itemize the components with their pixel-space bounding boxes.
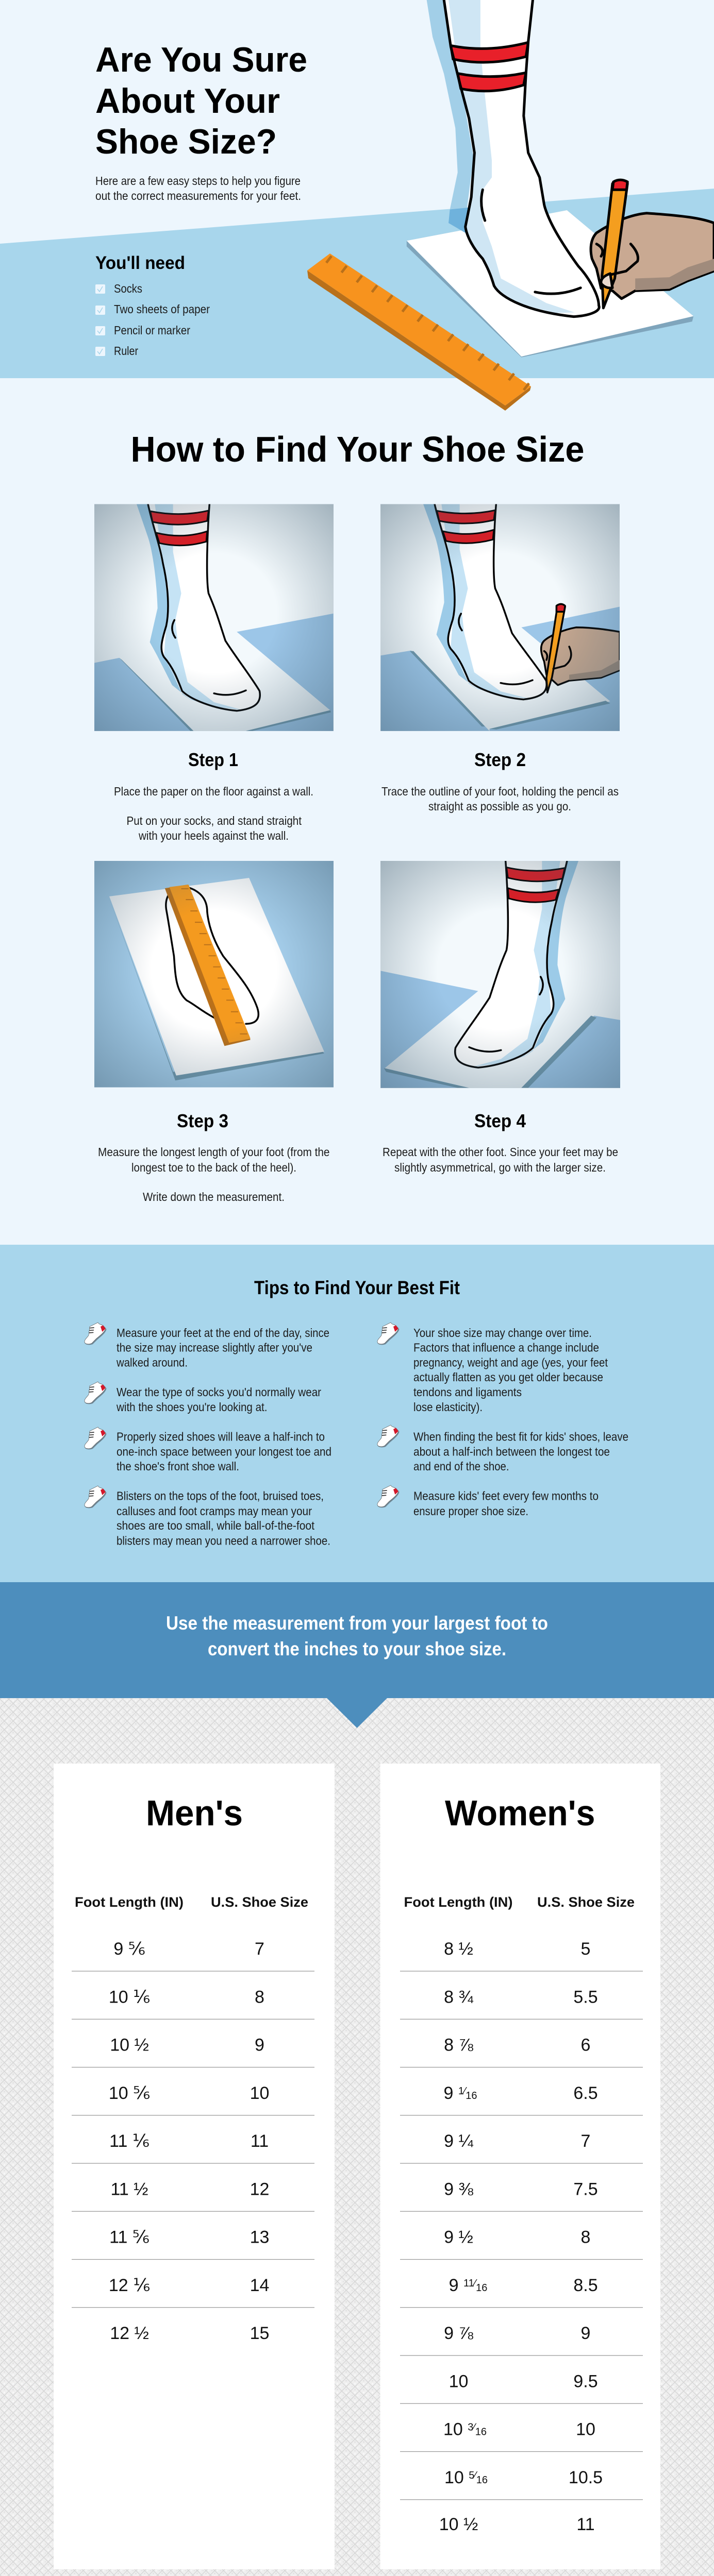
women's rows: 10 [444,2468,464,2487]
women's rows: 8 ¾ [444,1987,473,2007]
tips right column: Measure kids' feet every few months to [413,1489,599,1503]
men's rows: 11 [251,2131,269,2151]
women's rows: 9 ¼ [444,2131,473,2151]
women's rows: 9 ⅜ [444,2179,473,2199]
tips left column: blisters may mean you need a narrower shoe. [117,1534,330,1548]
caption: step 2: Step 2 [474,749,526,770]
women's rows: 8 ⅞ [444,2035,473,2055]
caption: step 2 [381,749,619,813]
tips right column: about a half-inch between the longest toe [413,1445,610,1458]
icon: ruler [307,253,531,411]
subtitle: out the correct measurements for your feet. [95,189,301,202]
women's rows: 10.5 [569,2468,603,2487]
women's rows: 9 [581,2324,590,2343]
tips left column: shoes are too small, while ball-of-the-foot [117,1519,315,1532]
tips right column: Factors that influence a change include [413,1341,599,1354]
tips left column: with the shoes you're looking at. [116,1400,268,1414]
checklist: you'll need: Ruler [114,344,138,358]
men's rows: 10 ⅙ [109,1987,150,2007]
table headers: U.S. Shoe Size [537,1894,635,1910]
tips right column: lose elasticity). [413,1400,483,1414]
men's rows [109,1939,269,2343]
tips right column: and end of the shoe. [413,1460,509,1473]
floor [0,189,714,378]
women's rows: ⁄ [472,2278,477,2289]
heading: women's: Women's [445,1793,595,1833]
caption: step 4: Step 4 [474,1110,526,1131]
men's rows: 11 ½ [110,2179,148,2199]
checklist: you'll need: You'll need [95,253,185,273]
men's rows: 12 ⅙ [109,2276,150,2295]
image: step 1 [94,504,334,732]
women's rows: 5 [469,2470,474,2481]
women's rows: 7 [581,2131,590,2151]
tips right column: ensure proper shoe size. [413,1504,528,1518]
women's rows: 10 [443,2419,463,2439]
table headers: U.S. Shoe Size [211,1894,308,1910]
women's rows: 9.5 [573,2371,598,2391]
men's rows: 11 ⅙ [109,2131,150,2151]
women's rows: 3 [468,2421,473,2433]
banner: convert the inches to your shoe size. [208,1638,506,1659]
checklist: you'll need: Socks [114,282,142,295]
caption: step 1: with your heels against the wall. [138,829,289,842]
subtitle [95,174,301,202]
caption: step 4: Repeat with the other foot. Since your feet may be [383,1145,618,1159]
women's rows: ⁄ [472,2470,477,2481]
image: step 4 [380,861,621,1088]
caption: step 1: Put on your socks, and stand straight [127,814,302,827]
women's rows: 8.5 [573,2276,598,2295]
women's rows: 16 [466,2090,477,2102]
caption: step 4 [383,1110,618,1174]
women's rows: 6 [581,2035,590,2055]
title: About Your [95,81,280,121]
women's rows: 16 [476,2475,488,2486]
tips left column: Wear the type of socks you'd normally wear [117,1385,321,1399]
caption: step 3: Measure the longest length of your foot (from the [98,1145,330,1159]
men's rows: 10 [250,2083,269,2103]
tips left column: calluses and foot cramps may mean your [117,1504,312,1518]
title: Shoe Size? [95,122,277,161]
heading: men's: Men's [146,1793,243,1833]
heading: how to find your shoe size: How to Find Your Shoe Size [131,429,585,469]
checklist: you'll need [95,253,210,358]
women's rows: 16 [475,2427,487,2438]
illustration: foot being traced on paper [407,0,714,358]
men's rows: 9 ⅚ [113,1939,145,1959]
panel: tips [0,1245,714,1582]
table headers: Foot Length (IN) [404,1894,512,1910]
caption: step 1: Step 1 [188,749,238,770]
women's rows: 11 [576,2515,595,2534]
subtitle: Here are a few easy steps to help you figure [95,174,301,188]
image: step 3 [94,861,334,1088]
banner: Use the measurement from your largest foot to [166,1613,548,1634]
banner [0,1582,714,1728]
men's rows: 10 ⅚ [109,2083,150,2103]
caption: step 1 [114,749,313,842]
caption: step 1: Place the paper on the floor against a wall. [114,785,313,798]
men's rows: 11 ⅚ [109,2228,150,2247]
women's rows: 9 [443,2083,453,2103]
image: step 2 [380,504,620,732]
caption: step 3 [98,1110,330,1204]
tips right column: actually flatten as you get older because [413,1370,603,1384]
tips left column: one-inch space between your longest toe and [117,1445,331,1458]
tips right column: tendons and ligaments [413,1385,522,1399]
women's rows: 6.5 [573,2083,598,2103]
tip icons [85,1323,400,1508]
men's rows: 7 [255,1939,264,1959]
women's rows: 11 [463,2278,474,2289]
panel: hero [0,0,714,1245]
checklist: you'll need: Two sheets of paper [114,302,210,316]
table headers: Foot Length (IN) [75,1894,184,1910]
tips left column: Properly sized shoes will leave a half-inch to [117,1430,325,1444]
tips right column: When finding the best fit for kids' shoes, leave [413,1430,628,1444]
title: Are You Sure [95,40,307,79]
tips right column: Your shoe size may change over time. [413,1326,592,1340]
women's rows: 8 [581,2228,590,2247]
men's rows: 15 [250,2324,269,2343]
women's rows: 9 ⅞ [444,2324,473,2343]
tips right column [413,1326,628,1518]
caption: step 4: slightly asymmetrical, go with the larger size. [394,1161,606,1174]
women's rows: 5.5 [573,1987,598,2007]
women's rows: 9 ½ [444,2228,473,2247]
men's rows: 9 [255,2035,264,2055]
panel: men's chart [54,1764,335,2569]
heading: tips: Tips to Find Your Best Fit [254,1277,460,1298]
women's rows [439,1939,603,2534]
men's rows: 12 [250,2179,269,2199]
men's rows: 13 [250,2228,269,2247]
women's rows: 16 [476,2282,487,2294]
tips left column: walked around. [116,1356,188,1369]
title [95,40,307,161]
tips right column: pregnancy, weight and age (yes, your feet [413,1356,608,1369]
caption: step 3: longest toe to the back of the heel). [131,1161,296,1174]
tips left column: the size may increase slightly after you've [117,1341,312,1354]
women's rows: 9 [449,2276,459,2295]
women's rows: 10 ½ [439,2515,478,2534]
table headers [404,1894,635,1910]
caption: step 3: Write down the measurement. [143,1190,285,1204]
women's rows: 5 [581,1939,590,1959]
tips left column [116,1326,331,1548]
women's rows: ⁄ [471,2421,476,2433]
women's rows: ⁄ [461,2086,467,2097]
women's rows: 7.5 [573,2179,598,2199]
men's rows: 10 ½ [110,2035,149,2055]
women's rows: 8 ½ [444,1939,473,1959]
tips left column: Blisters on the tops of the foot, bruised toes, [117,1489,324,1503]
pattern background [0,1698,714,2576]
tips left column: the shoe's front shoe wall. [117,1460,239,1473]
men's rows: 8 [255,1987,264,2007]
men's rows: 14 [250,2276,269,2295]
caption: step 2: straight as possible as you go. [428,800,571,813]
checklist: you'll need: Pencil or marker [114,324,190,337]
caption: step 3: Step 3 [177,1110,228,1131]
women's rows: 10 [449,2371,468,2391]
panel: women's chart [380,1764,660,2569]
women's rows: 1 [458,2086,464,2097]
men's rows: 12 ½ [110,2324,149,2343]
caption: step 2: Trace the outline of your foot, holding the pencil as [381,785,619,798]
tips left column: Measure your feet at the end of the day, since [117,1326,329,1340]
table headers [75,1894,308,1910]
women's rows: 10 [576,2419,595,2439]
